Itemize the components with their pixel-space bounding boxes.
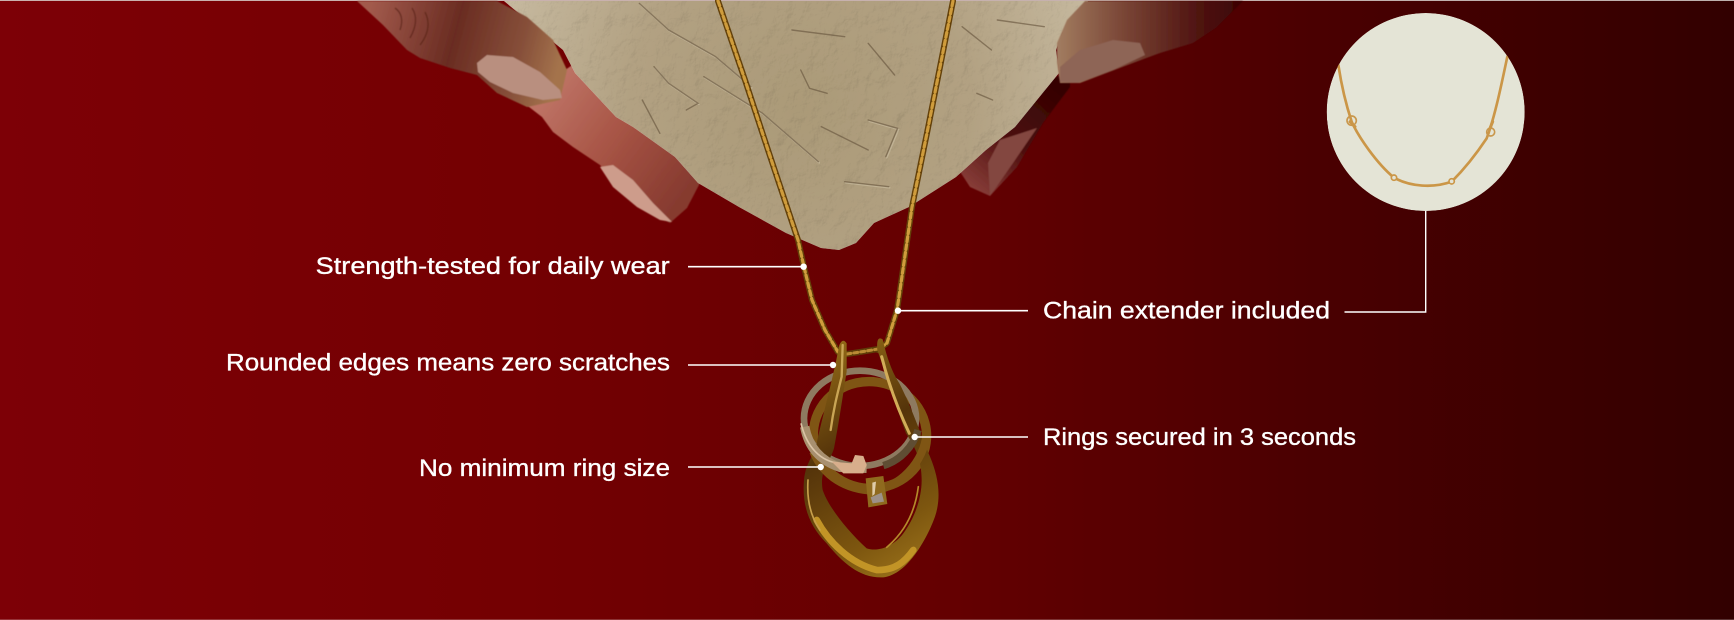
pale ring back arc [804, 371, 916, 466]
right thumb [1057, 1, 1243, 83]
rock body [504, 1, 1088, 250]
feature callouts left [226, 253, 836, 482]
left finger nail [600, 165, 672, 222]
chain bridge [840, 349, 878, 355]
callout: strength-tested: Strength-tested for daily wear [316, 253, 670, 280]
callout: rounded edges: Rounded edges means zero scratches [226, 350, 670, 376]
right thumb nail [1060, 40, 1145, 83]
right lower finger [957, 70, 1070, 196]
left thumb wrinkles [395, 8, 428, 45]
callout: chain extender arrow to chain [895, 308, 1028, 314]
left lower finger [520, 60, 720, 223]
pendant highlights [808, 345, 918, 547]
left thumb nail [477, 55, 562, 100]
back gold ring [806, 374, 934, 496]
extender clasps and rings [1347, 116, 1495, 184]
callout: strength-tested [316, 253, 807, 280]
right lower nail [988, 128, 1037, 196]
right strand [878, 1, 953, 350]
ring stone setting [866, 476, 887, 507]
feature callouts right [895, 298, 1356, 451]
callout: rounded edges [226, 350, 836, 376]
pendant bottom highlight [817, 520, 913, 570]
callout: rings secured: Rings secured in 3 seconds [1043, 424, 1356, 451]
extender chain [1338, 57, 1507, 186]
left thumb [357, 1, 567, 107]
left strand [718, 1, 838, 352]
connector to inset [1344, 211, 1426, 312]
callout: no minimum ring size [419, 455, 824, 482]
callout: rings secured [912, 424, 1356, 451]
necklace chain [718, 1, 953, 355]
ring shoulder [832, 455, 867, 473]
rock crack highlights [640, 5, 899, 188]
ring holder pendant with rings [801, 338, 939, 577]
callout: no minimum ring size: No minimum ring size [419, 455, 670, 482]
callout: chain extender label: Chain extender included [1043, 298, 1330, 324]
clay rock [504, 1, 1088, 250]
inset circle: chain extender [1327, 13, 1525, 211]
front ring arcs [801, 423, 927, 491]
rock cracks [639, 3, 1044, 187]
pendant loop [804, 338, 939, 577]
